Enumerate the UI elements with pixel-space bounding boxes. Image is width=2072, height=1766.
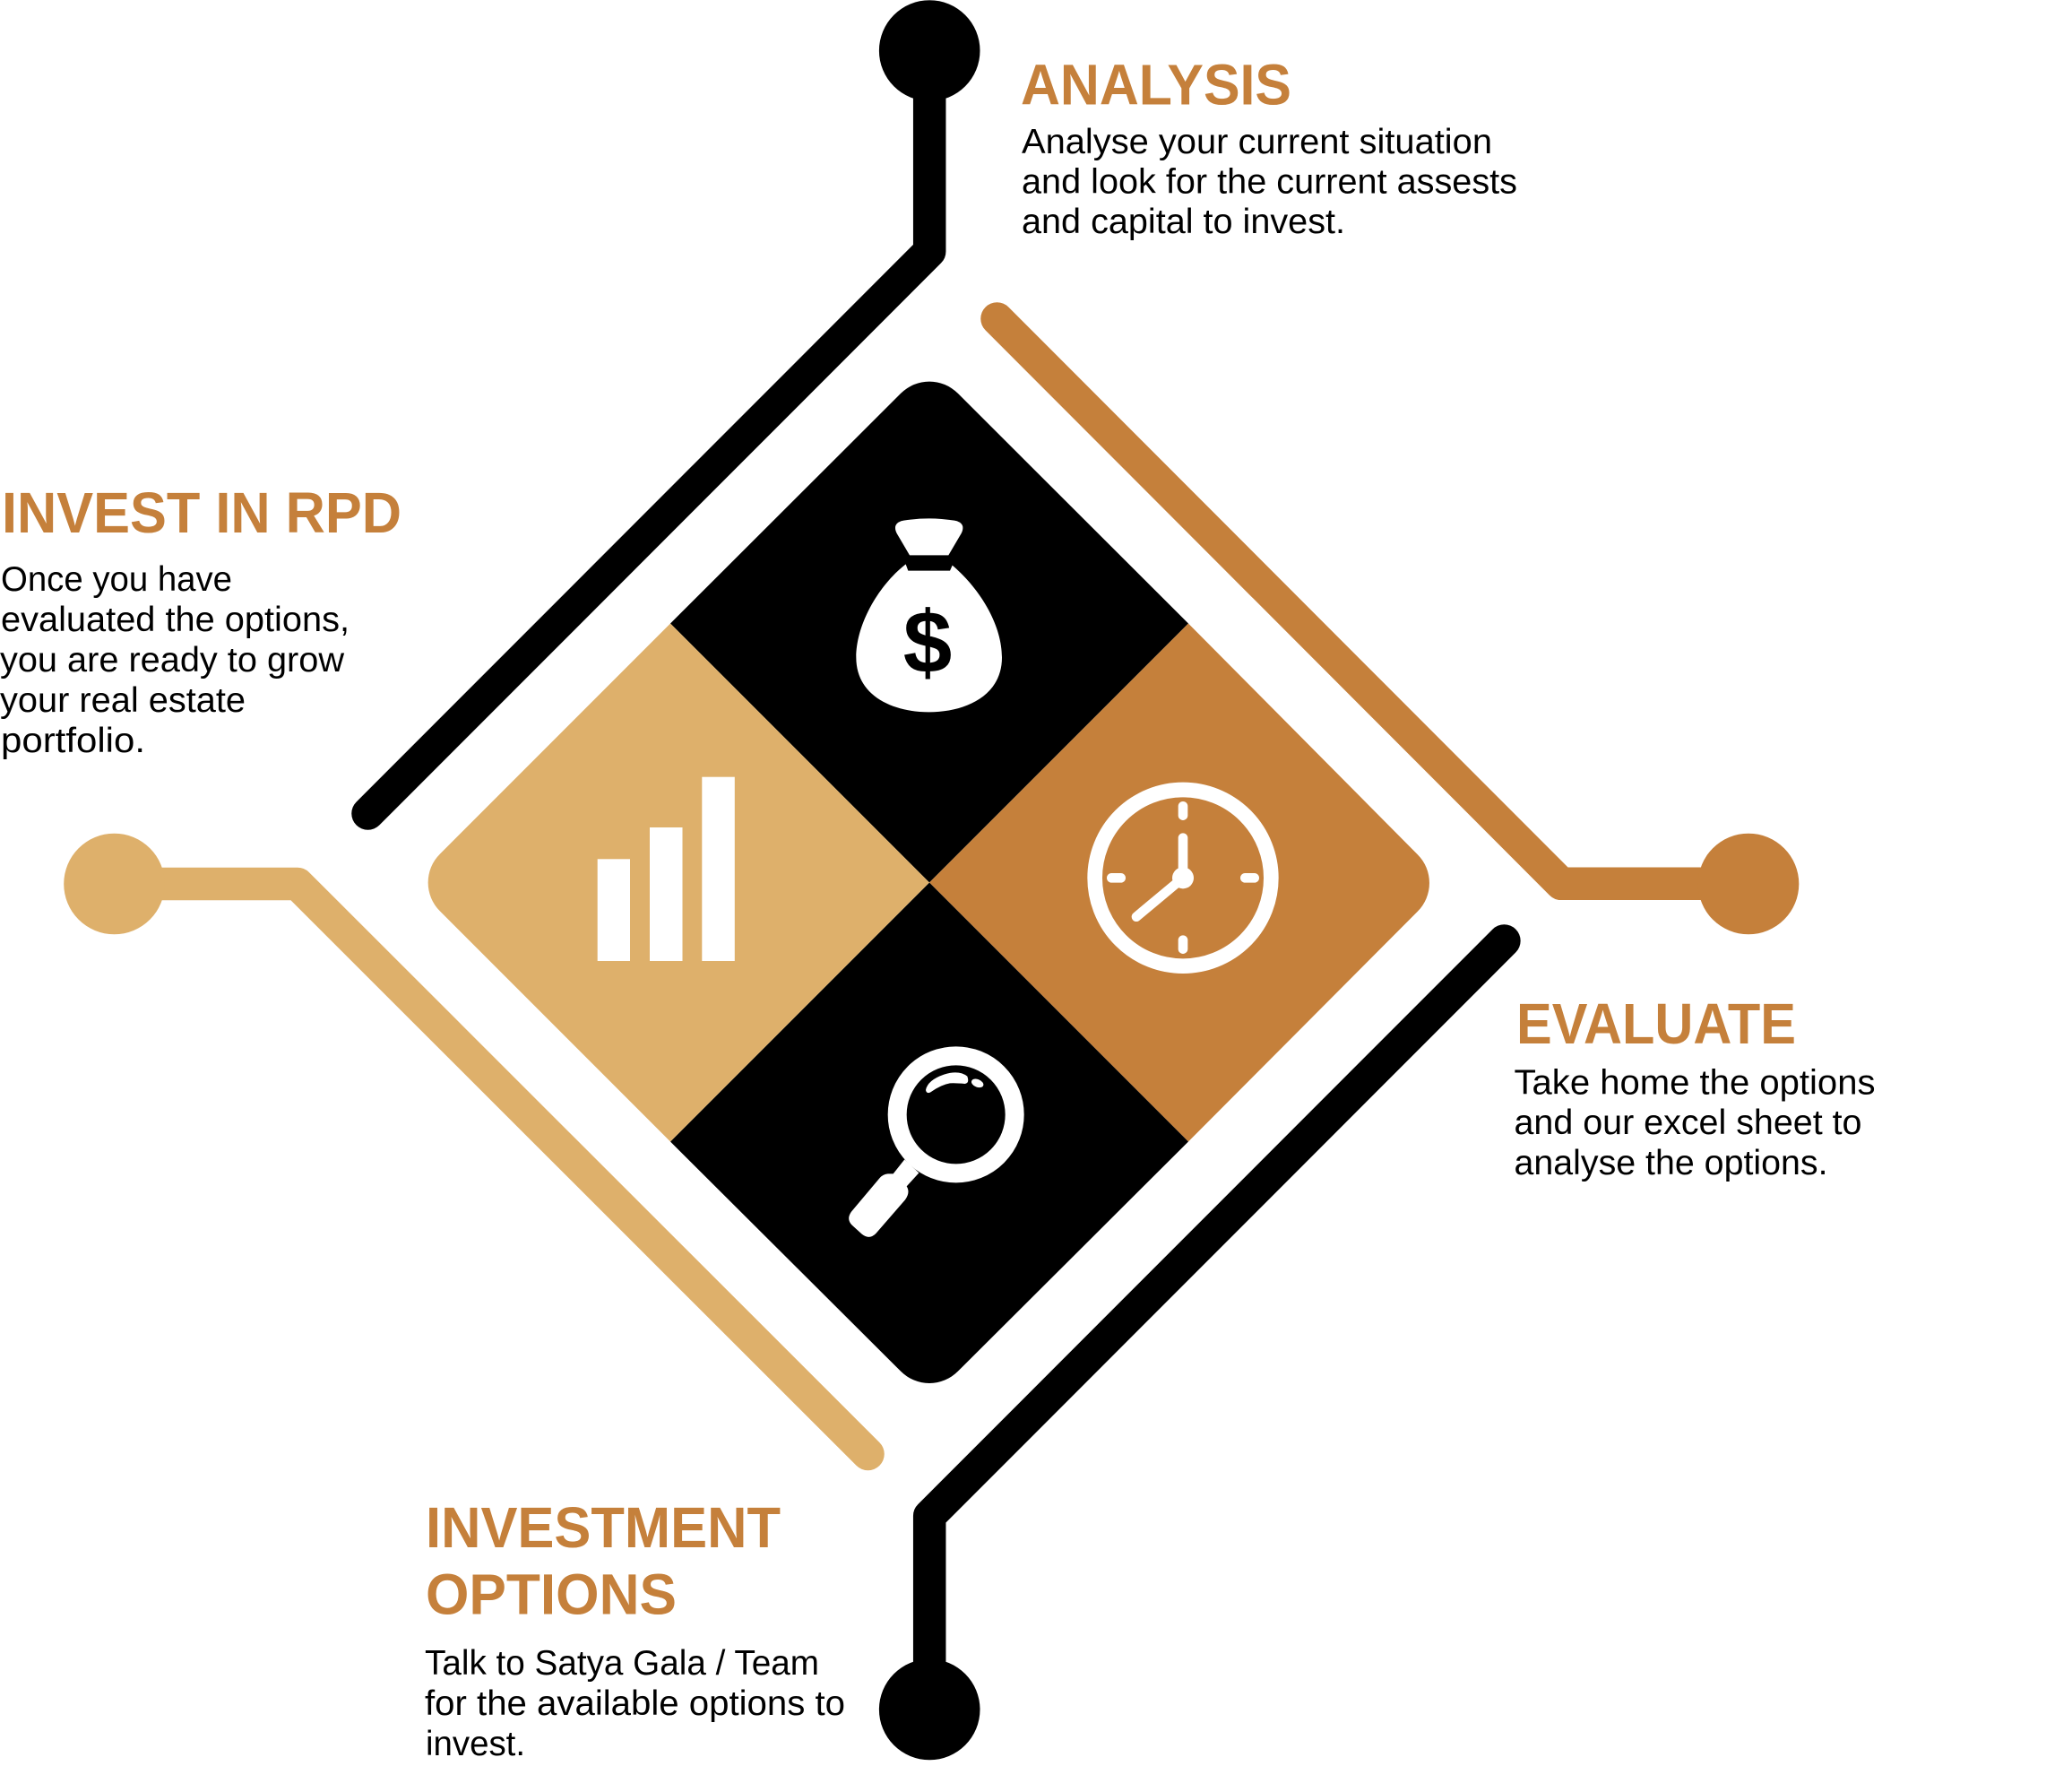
body: evaluate [1515,1063,1875,1182]
body: evaluate: and our excel sheet to [1515,1104,1862,1142]
heading: investment options [426,1495,781,1626]
heading: invest in rpd: INVEST IN RPD [2,480,401,545]
connector: left tan line with circle [64,834,868,1454]
text block: evaluate [1515,991,1875,1182]
text block: investment options [425,1495,845,1763]
body: analysis: Analyse your current situation [1022,123,1492,161]
panel: left tan quadrant [428,624,929,1142]
connector: top black line with circle [367,0,980,813]
icon: bar chart [598,777,735,961]
connector: right gold line with circle [997,319,1799,934]
heading: investment options: INVESTMENT [426,1495,781,1560]
body: invest in rpd: Once you have [1,560,232,599]
heading: analysis: ANALYSIS [1021,52,1291,117]
body: invest in rpd [0,560,350,760]
body: investment options: invest. [426,1725,525,1763]
body: invest in rpd: your real estate [0,681,246,720]
body: analysis: and capital to invest. [1022,203,1345,241]
body: analysis: and look for the current assests [1022,163,1517,201]
text block: invest in rpd [0,480,401,760]
body: invest in rpd: evaluated the options, [1,601,350,639]
body: investment options: for the available options to [425,1684,845,1723]
panel: top black quadrant [670,382,1188,882]
central diamond [428,382,1429,1383]
icon: money bag: $ [903,593,952,691]
body: analysis [1022,123,1517,241]
panel: right gold quadrant [929,624,1429,1142]
body: invest in rpd: portfolio. [1,722,145,760]
icon: magnifying glass [849,1056,1014,1237]
body: evaluate: analyse the options. [1515,1144,1828,1182]
body: investment options: Talk to Satya Gala / Team [425,1644,819,1683]
connector: bottom black line with circle [879,941,1504,1760]
body: evaluate: Take home the options [1515,1063,1875,1103]
icon: money bag [856,518,1002,712]
panel: bottom black quadrant [670,882,1188,1383]
text block: analysis [1021,52,1517,241]
icon: clock [1095,790,1271,966]
body: investment options [425,1644,845,1763]
heading: evaluate: EVALUATE [1516,991,1796,1056]
body: invest in rpd: you are ready to grow [0,641,345,680]
heading: investment options: OPTIONS [426,1562,677,1626]
